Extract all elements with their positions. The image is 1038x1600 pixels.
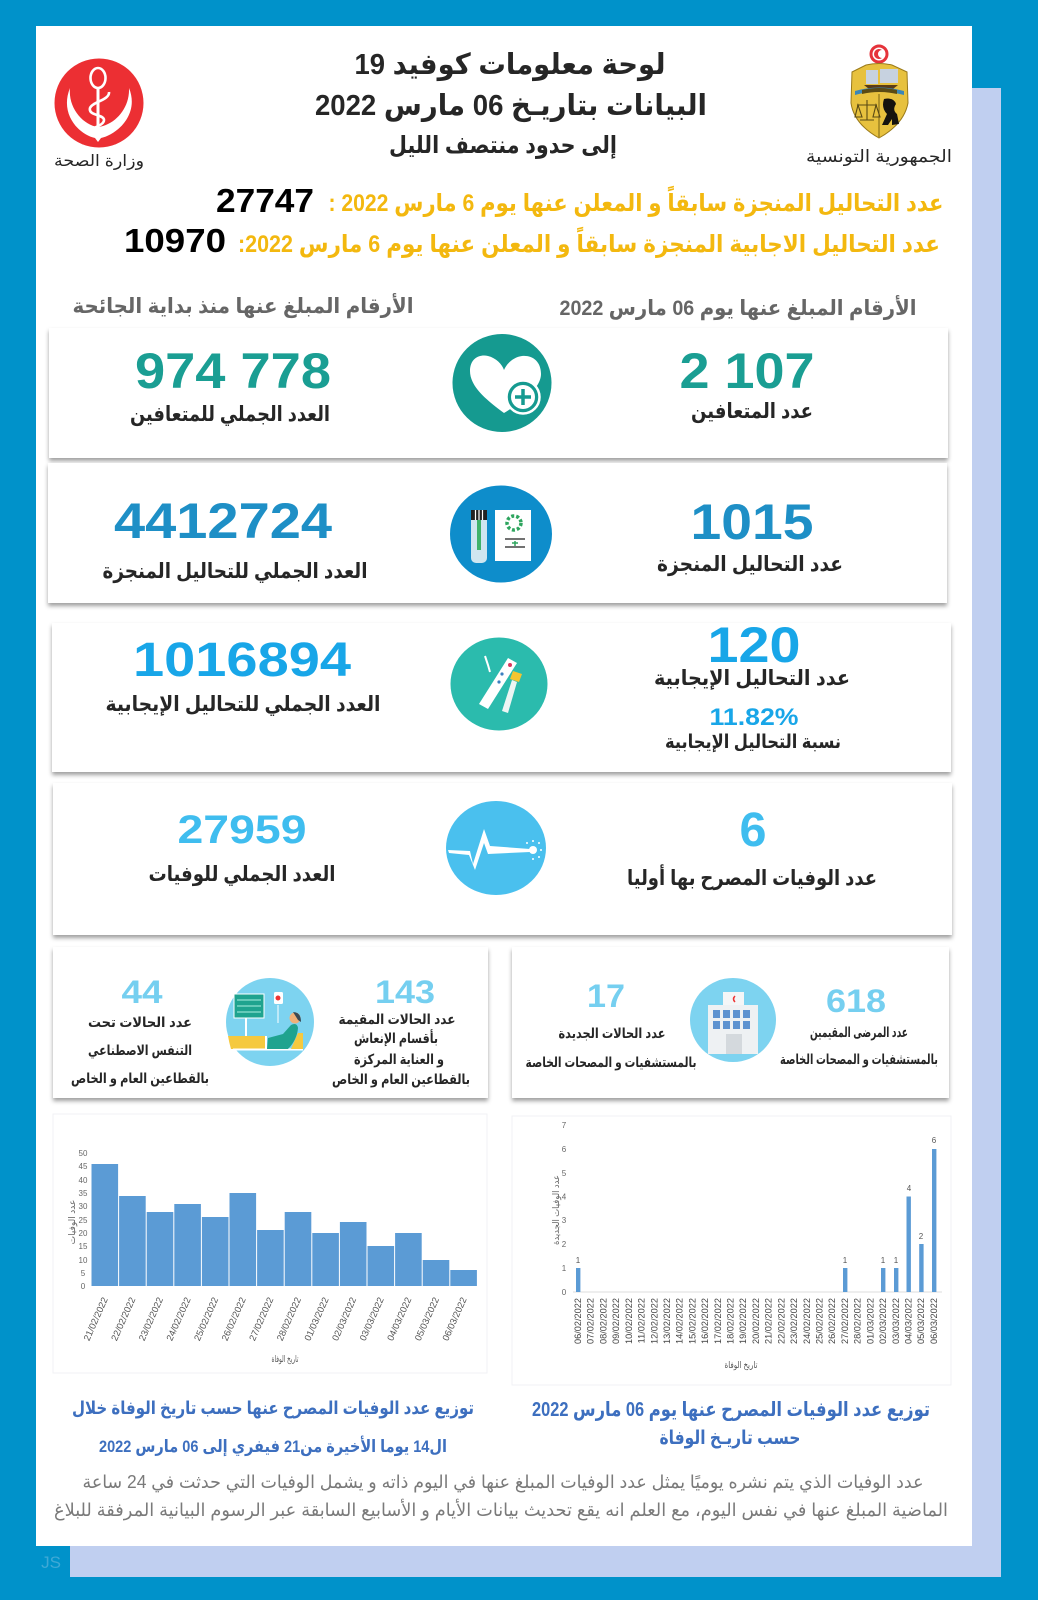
panel: positive tests: نسبة التحاليل الإيجابية: [665, 732, 841, 753]
panel: positive tests: 11.82%: [710, 704, 798, 731]
title: [315, 49, 707, 159]
panel: tests done: عدد التحاليل المنجزة: [657, 553, 843, 576]
panel: positive tests: 120: [708, 617, 800, 673]
bar chart: deaths reported on 6 March: 23/02/2022: [789, 1298, 799, 1344]
bar chart: deaths over last 14 days: 5: [81, 1269, 86, 1278]
panel: intensive care and ventilation: 44: [122, 974, 163, 1010]
bar chart: deaths reported on 6 March: 03/03/2022: [891, 1298, 901, 1344]
caption: left chart: [72, 1398, 474, 1457]
bar chart: deaths reported on 6 March: 22/02/2022: [776, 1298, 786, 1344]
bar chart: deaths reported on 6 March: 6: [932, 1136, 937, 1145]
bar chart: deaths reported on 6 March: 16/02/2022: [700, 1298, 710, 1344]
bar chart: deaths reported on 6 March: 4: [562, 1192, 567, 1202]
column heading: daily: الأرقام المبلغ عنها يوم 06 مارس 2022: [560, 294, 916, 320]
bar chart: deaths reported on 6 March: 1: [843, 1256, 848, 1265]
bar chart: deaths over last 14 days: 50: [79, 1149, 88, 1158]
bar chart: deaths reported on 6 March: 05/03/2022: [916, 1298, 926, 1344]
bar chart: deaths reported on 6 March: 09/02/2022: [611, 1298, 621, 1344]
panel: hospitalised patients: عدد المرضى المقيمين: [810, 1024, 908, 1041]
bar chart: deaths reported on 6 March: 5: [562, 1169, 567, 1178]
caption: left chart: توزيع عدد الوفيات المصرح عنها حسب تاريخ الوفاة خلال: [72, 1398, 474, 1419]
logo: ministry of health: [54, 58, 144, 171]
bar chart: deaths over last 14 days: 23/02/2022: [137, 1296, 165, 1342]
title: إلى حدود منتصف الليل: [389, 132, 617, 159]
bar chart: deaths reported on 6 March: 1: [562, 1264, 567, 1273]
bar chart: deaths over last 14 days: 02/03/2022: [330, 1296, 358, 1342]
bar chart: deaths reported on 6 March: 2: [562, 1240, 567, 1249]
panel: intensive care and ventilation: بأقسام الإنعاش: [354, 1029, 438, 1047]
panel: positive tests: 1016894: [133, 634, 351, 687]
bar chart: deaths over last 14 days: 01/03/2022: [303, 1296, 331, 1342]
panel: recovered: 974 778: [135, 343, 331, 399]
panel: positive tests: العدد الجملي للتحاليل الإيجابية: [106, 693, 380, 716]
bar chart: deaths over last 14 days: عدد الوفيات: [67, 1200, 77, 1244]
bar chart: deaths reported on 6 March: 08/02/2022: [598, 1298, 608, 1344]
bar chart: deaths reported on 6 March: 18/02/2022: [726, 1298, 736, 1344]
bar chart: deaths reported on 6 March: 19/02/2022: [738, 1298, 748, 1344]
bar chart: deaths reported on 6 March: 02/03/2022: [878, 1298, 888, 1344]
bar chart: deaths reported on 6 March: 1: [881, 1256, 886, 1265]
bar chart: deaths reported on 6 March: 7: [562, 1121, 567, 1130]
panel: recovered: عدد المتعافين: [691, 400, 813, 423]
bar chart: deaths reported on 6 March: 26/02/2022: [827, 1298, 837, 1344]
previous tests line: [216, 182, 943, 219]
bar chart: deaths over last 14 days: 25/02/2022: [192, 1296, 220, 1342]
bar chart: deaths over last 14 days: 10: [79, 1256, 88, 1265]
bar chart: deaths reported on 6 March: عدد الوفيات الجديدة: [551, 1175, 561, 1245]
title: البيانات بتاريـخ 06 مارس 2022: [315, 90, 707, 122]
panel: hospitalised patients: 618: [826, 983, 886, 1019]
bar chart: deaths over last 14 days: 35: [79, 1189, 88, 1198]
logo: coat of arms of Tunisia: الجمهورية التونسية: [806, 147, 952, 167]
panel: tests done: 4412724: [114, 493, 332, 549]
bar chart: deaths reported on 6 March: 20/02/2022: [751, 1298, 761, 1344]
bar chart: deaths reported on 6 March: 2: [919, 1232, 924, 1241]
panel: deaths: العدد الجملي للوفيات: [148, 863, 336, 886]
caption: right chart: [532, 1399, 930, 1449]
bar chart: deaths reported on 6 March: 1: [576, 1256, 581, 1265]
bar chart: deaths over last 14 days: 28/02/2022: [275, 1296, 303, 1342]
panel: positive tests: [52, 617, 951, 772]
title: لوحة معلومات كوفيد 19: [354, 49, 666, 81]
caption: right chart: توزيع عدد الوفيات المصرح عنها يوم 06 مارس 2022: [532, 1399, 930, 1421]
caption: left chart: ال14 يوما الأخيرة من21 فيفري إلى 06 مارس 2022: [99, 1436, 447, 1457]
bar chart: deaths over last 14 days: 30: [79, 1202, 88, 1211]
bar chart: deaths reported on 6 March: تاريخ الوفاة: [724, 1360, 758, 1370]
bar chart: deaths reported on 6 March: 1: [894, 1256, 899, 1265]
panel: recovered: 2 107: [680, 343, 814, 399]
panel: intensive care and ventilation: عدد الحالات تحت: [88, 1014, 192, 1030]
panel: tests done: 1015: [690, 494, 814, 550]
panel: tests done: [48, 463, 947, 603]
panel: deaths: عدد الوفيات المصرح بها أوليا: [627, 863, 877, 890]
bar chart: deaths over last 14 days: 26/02/2022: [220, 1296, 248, 1342]
previous positive tests line: عدد التحاليل الاجابية المنجزة سابقاً و المعلن عنها يوم 6 مارس 2022:: [238, 227, 940, 258]
previous positive tests line: 10970: [124, 222, 226, 259]
panel: intensive care and ventilation: [53, 947, 488, 1098]
bar chart: deaths reported on 6 March: 01/03/2022: [865, 1298, 875, 1344]
caption: right chart: حسب تاريـخ الوفاة: [660, 1428, 800, 1449]
panel: hospitalised patients: بالمستشفيات و المصحات الخاصة: [780, 1051, 938, 1068]
bar chart: deaths reported on 6 March: 12/02/2022: [649, 1298, 659, 1344]
bar chart: deaths over last 14 days: 20: [79, 1229, 88, 1238]
bar chart: deaths reported on 6 March: 06/03/2022: [929, 1298, 939, 1344]
watermark: JS: [41, 1553, 61, 1572]
panel: deaths: [53, 783, 952, 935]
bar chart: deaths over last 14 days: 24/02/2022: [165, 1296, 193, 1342]
bar chart: deaths reported on 6 March: 28/02/2022: [853, 1298, 863, 1344]
bar chart: deaths over last 14 days: 25: [79, 1216, 88, 1225]
bar chart: deaths over last 14 days: 22/02/2022: [109, 1296, 137, 1342]
bar chart: deaths reported on 6 March: [512, 1116, 951, 1385]
footnote: [54, 1472, 948, 1521]
bar chart: deaths reported on 6 March: 0: [562, 1288, 567, 1297]
bar chart: deaths over last 14 days: 40: [79, 1176, 88, 1185]
panel: intensive care and ventilation: عدد الحالات المقيمة: [338, 1011, 456, 1027]
bar chart: deaths over last 14 days: 0: [81, 1282, 86, 1291]
bar chart: deaths reported on 6 March: 21/02/2022: [764, 1298, 774, 1344]
bar chart: deaths reported on 6 March: 14/02/2022: [675, 1298, 685, 1344]
bar chart: deaths over last 14 days: 06/03/2022: [441, 1296, 469, 1342]
icon: rapid test strips: [450, 638, 548, 730]
panel: recovered: [49, 328, 948, 458]
panel: intensive care and ventilation: بالقطاعين العام و الخاص: [332, 1071, 470, 1088]
panel: intensive care and ventilation: و العناية المركزة: [354, 1051, 444, 1068]
panel: deaths: 6: [740, 804, 766, 857]
bar chart: deaths over last 14 days: [53, 1114, 487, 1373]
bar chart: deaths over last 14 days: 05/03/2022: [413, 1296, 441, 1342]
column heading: cumulative: الأرقام المبلغ عنها منذ بداية الجائحة: [72, 292, 414, 318]
icon: pulse line: [446, 801, 546, 895]
panel: hospitalised patients: بالمستشفيات و المصحات الخاصة: [526, 1054, 696, 1071]
previous tests line: 27747: [216, 182, 314, 219]
footnote: الماضية المبلغ عنها في نفس اليوم، مع العلم انه يقع تحديث بيانات الأيام و الأسابيع السابقة عبر الرسوم البيانية المرفقة للبلاغ: [54, 1499, 948, 1521]
bar chart: deaths over last 14 days: 03/03/2022: [358, 1296, 386, 1342]
bar chart: deaths over last 14 days: تاريخ الوفاة: [272, 1354, 299, 1364]
bar chart: deaths reported on 6 March: 24/02/2022: [802, 1298, 812, 1344]
panel: tests done: العدد الجملي للتحاليل المنجزة: [102, 560, 368, 583]
panel: hospitalised patients: عدد الحالات الجديدة: [558, 1025, 666, 1041]
bar chart: deaths over last 14 days: 27/02/2022: [247, 1296, 275, 1342]
bar chart: deaths over last 14 days: 04/03/2022: [385, 1296, 413, 1342]
panel: deaths: 27959: [178, 808, 306, 852]
bar chart: deaths reported on 6 March: 6: [562, 1145, 567, 1154]
bar chart: deaths reported on 6 March: 10/02/2022: [624, 1298, 634, 1344]
panel: intensive care and ventilation: بالقطاعين العام و الخاص: [71, 1070, 209, 1087]
bar chart: deaths reported on 6 March: 07/02/2022: [586, 1298, 596, 1344]
bar chart: deaths reported on 6 March: 04/03/2022: [904, 1298, 914, 1344]
panel: hospitalised patients: [512, 947, 949, 1098]
footnote: عدد الوفيات الذي يتم نشره يوميًا يمثل عدد الوفيات المبلغ عنها في اليوم ذاته و يشمل الوفيات التي حدثت في 24 ساعة: [82, 1472, 923, 1493]
panel: positive tests: عدد التحاليل الإيجابية: [654, 667, 850, 690]
icon: hospital: [690, 978, 776, 1062]
panel: intensive care and ventilation: التنفس الاصطناعي: [88, 1042, 192, 1059]
bar chart: deaths reported on 6 March: 4: [907, 1184, 912, 1193]
bar chart: deaths reported on 6 March: 3: [562, 1216, 567, 1225]
bar chart: deaths over last 14 days: 21/02/2022: [82, 1296, 110, 1342]
bar chart: deaths reported on 6 March: 11/02/2022: [636, 1298, 646, 1343]
bar chart: deaths reported on 6 March: 13/02/2022: [662, 1298, 672, 1344]
icon: patient in bed: [226, 978, 314, 1066]
bar chart: deaths reported on 6 March: 15/02/2022: [687, 1298, 697, 1344]
panel: recovered: العدد الجملي للمتعافين: [130, 403, 330, 426]
panel: hospitalised patients: 17: [587, 978, 625, 1014]
bar chart: deaths reported on 6 March: 17/02/2022: [713, 1298, 723, 1344]
icon: test tube and report: [450, 486, 552, 582]
previous tests line: عدد التحاليل المنجزة سابقاً و المعلن عنها يوم 6 مارس 2022 :: [328, 186, 943, 217]
panel: intensive care and ventilation: 143: [375, 974, 435, 1010]
logo: ministry of health: وزارة الصحة: [54, 153, 144, 171]
bar chart: deaths reported on 6 March: 27/02/2022: [840, 1298, 850, 1344]
icon: heart: [452, 334, 552, 432]
bar chart: deaths over last 14 days: 45: [79, 1162, 88, 1171]
bar chart: deaths reported on 6 March: 25/02/2022: [814, 1298, 824, 1344]
bar chart: deaths reported on 6 March: 06/02/2022: [573, 1298, 583, 1344]
previous positive tests line: [124, 222, 940, 259]
logo: coat of arms of Tunisia: [806, 46, 952, 167]
bar chart: deaths over last 14 days: 15: [79, 1242, 88, 1251]
